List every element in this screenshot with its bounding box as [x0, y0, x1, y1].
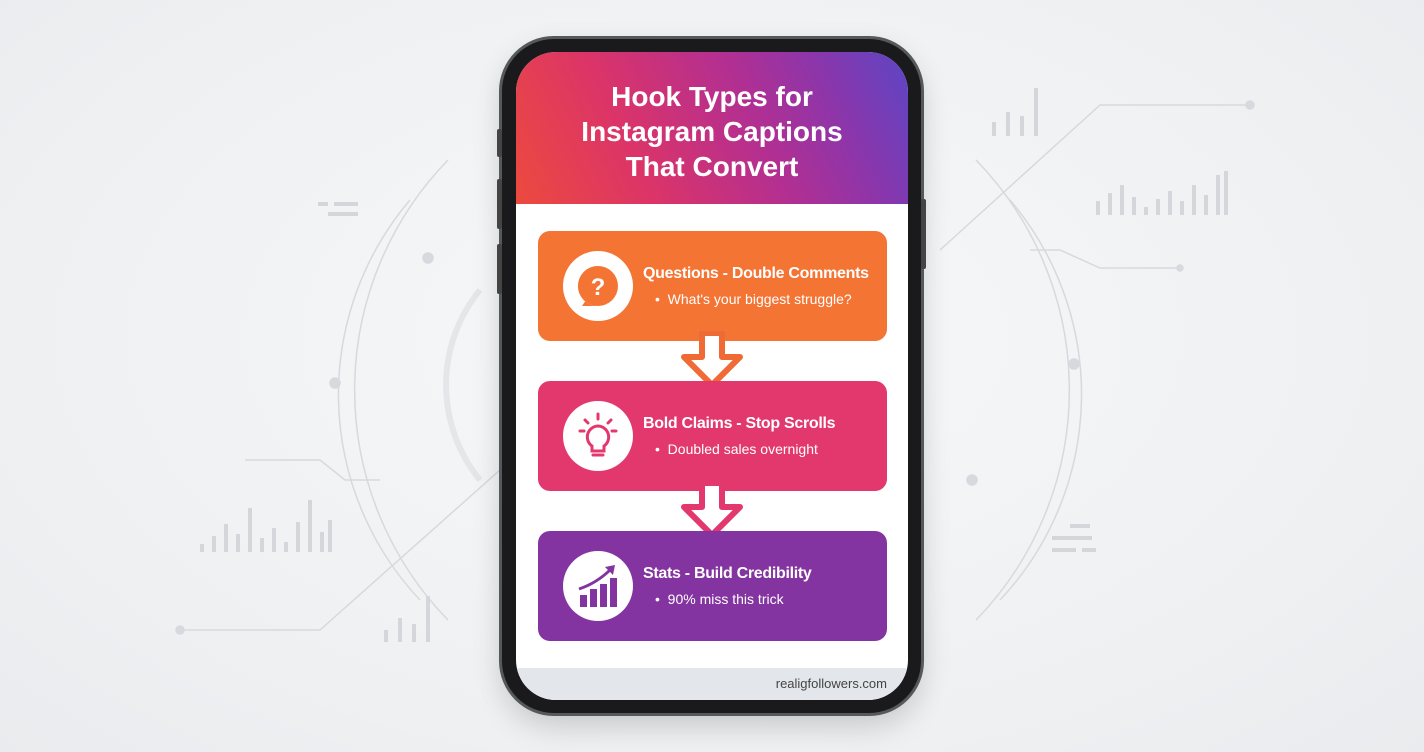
footer	[516, 668, 908, 700]
icon: chart	[563, 551, 633, 621]
footer text: realigfollowers.com	[776, 676, 887, 691]
card: stats	[538, 531, 887, 641]
card: bold claims: Bold Claims - Stop Scrolls	[643, 415, 835, 432]
screen	[516, 52, 908, 700]
icon: question bubble: ?	[591, 274, 605, 301]
title: That Convert	[626, 151, 798, 182]
card: stats: Stats - Build Credibility	[643, 565, 812, 582]
title	[581, 81, 843, 182]
card: bold claims: • Doubled sales overnight	[655, 441, 818, 457]
icon: lightbulb	[563, 401, 633, 471]
card: bold claims	[538, 381, 887, 491]
card: stats: • 90% miss this trick	[655, 591, 784, 607]
title: Hook Types for	[611, 81, 813, 112]
card: questions	[538, 231, 887, 341]
icon: question bubble	[563, 251, 633, 321]
card: questions: Questions - Double Comments	[643, 265, 869, 282]
arrow 2	[681, 486, 743, 531]
arrow 1	[681, 331, 743, 381]
title: Instagram Captions	[581, 116, 843, 147]
card: questions: • What's your biggest struggle?	[655, 291, 852, 307]
side buttons	[497, 129, 502, 157]
header	[516, 52, 908, 204]
phone	[502, 39, 921, 713]
